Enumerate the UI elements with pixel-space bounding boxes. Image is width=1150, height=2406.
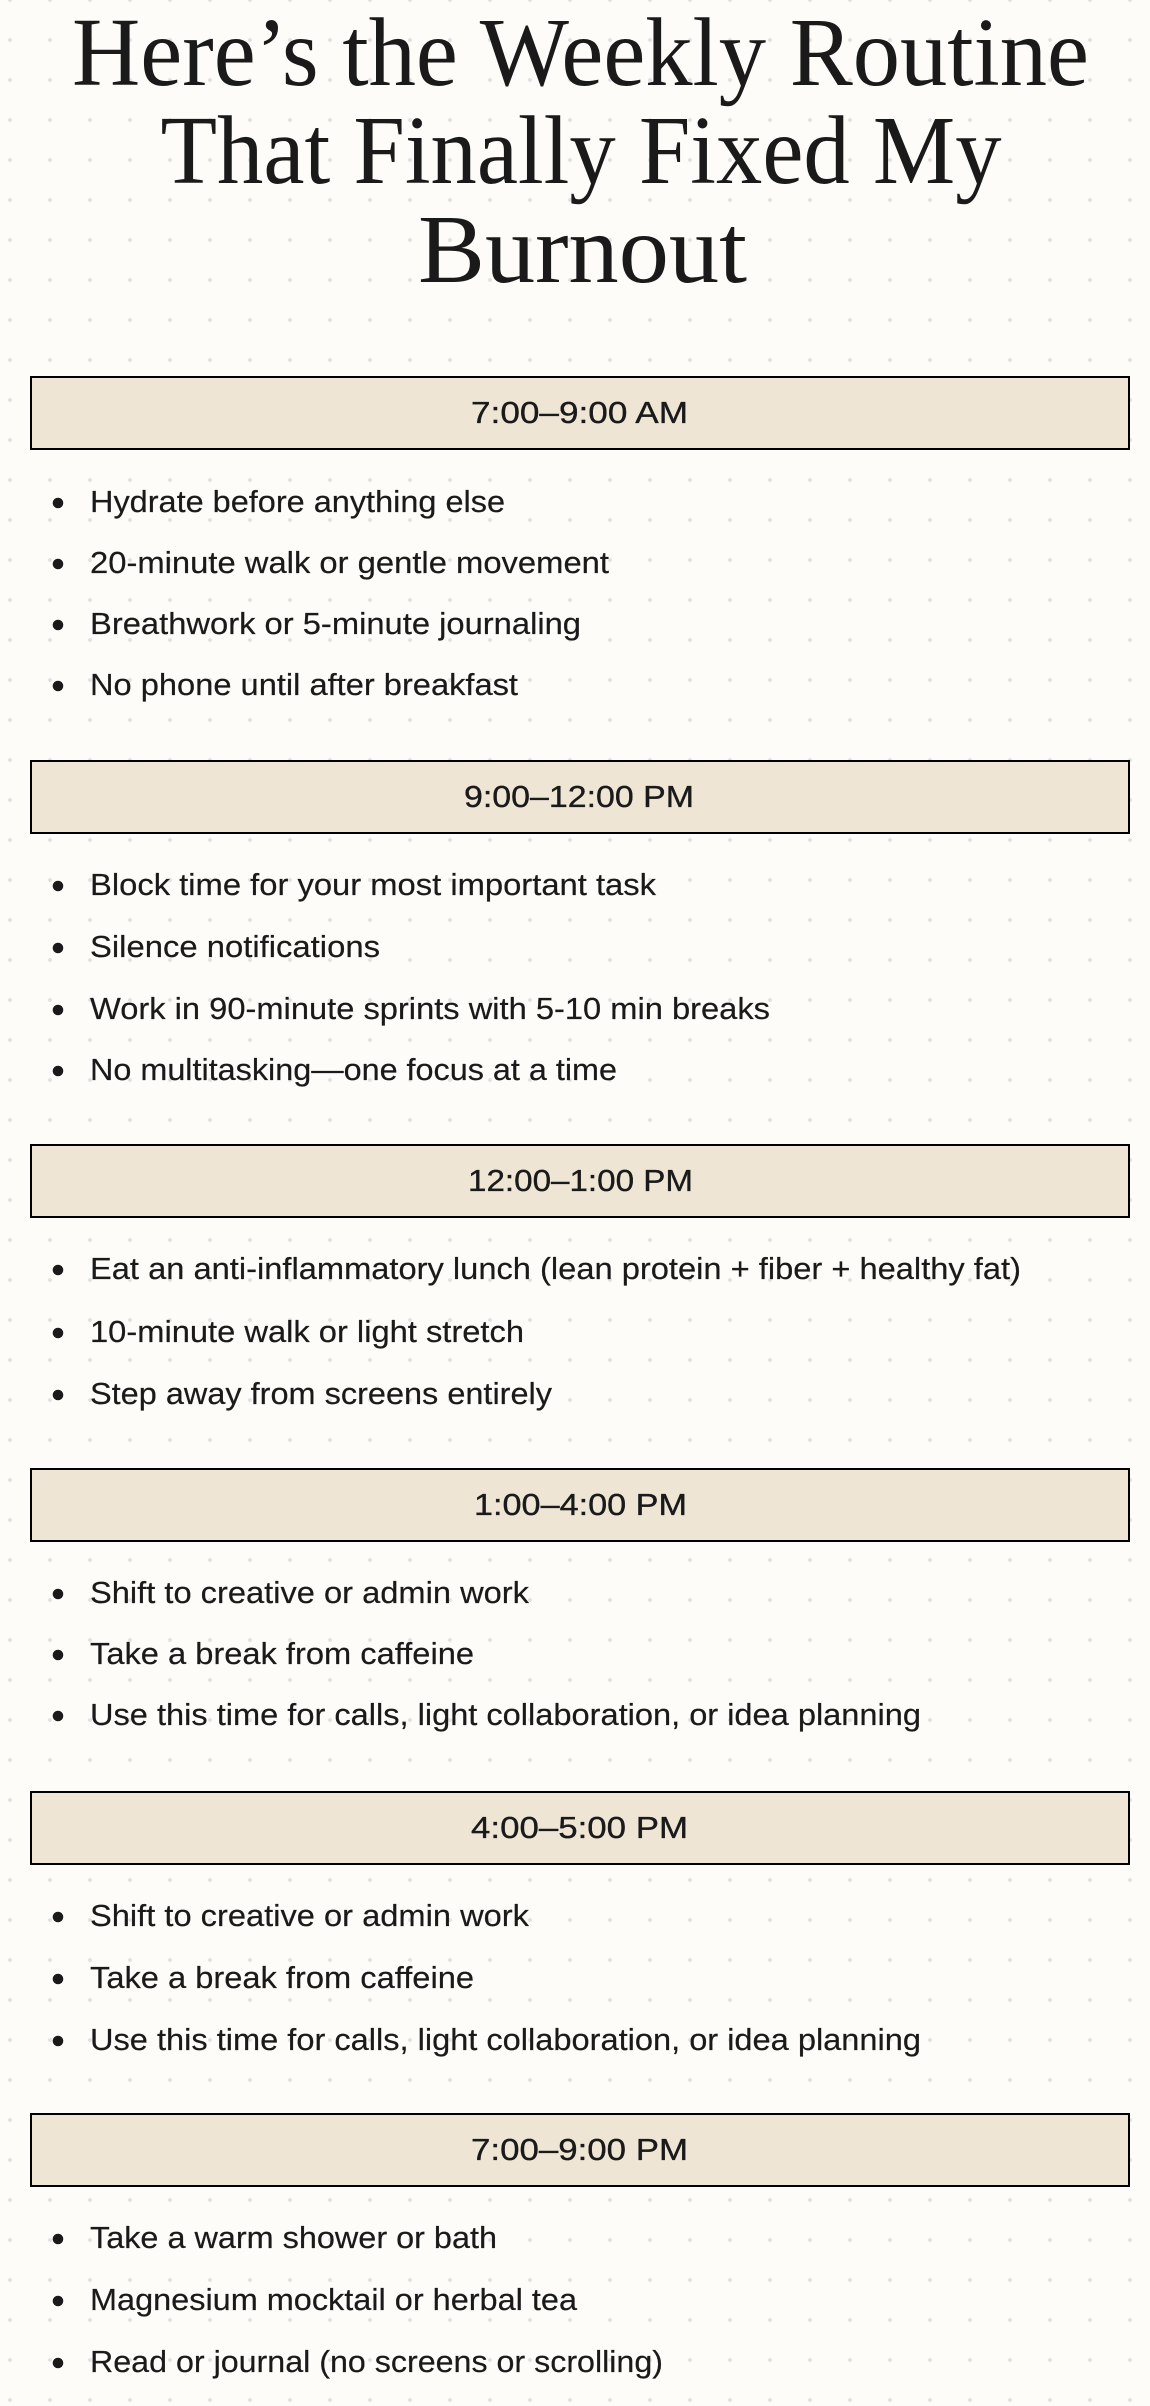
list: late morning items: Silence notifications <box>90 929 380 964</box>
panel: 4:00–5:00 PM <box>31 1792 1129 2057</box>
list: evening items: Read or journal (no screens or scrolling) <box>90 2344 663 2379</box>
title: Burnout <box>418 196 747 303</box>
heading: 1:00–4:00 PM: 1:00–4:00 PM <box>474 1487 687 1522</box>
heading: 7:00–9:00 AM <box>31 377 1129 449</box>
list: late afternoon items: Shift to creative or admin work <box>90 1898 530 1933</box>
list: evening items: Take a warm shower or bath <box>90 2220 497 2255</box>
panel: 12:00–1:00 PM <box>31 1145 1129 1411</box>
list: late afternoon items: Use this time for calls, light collaboration, or idea planning <box>90 2022 921 2057</box>
title <box>72 0 1089 303</box>
title: That Finally Fixed My <box>160 97 1002 204</box>
list: morning items: No phone until after breakfast <box>90 667 518 702</box>
heading: 9:00–12:00 PM: 9:00–12:00 PM <box>464 779 694 814</box>
heading: 4:00–5:00 PM <box>31 1792 1129 1864</box>
list: late afternoon items: Take a break from caffeine <box>90 1960 474 1995</box>
list: morning items: Hydrate before anything else <box>90 484 505 519</box>
list: lunch items: Eat an anti-inflammatory lunch (lean protein + fiber + healthy fat) <box>90 1251 1021 1286</box>
list: morning items: 20-minute walk or gentle movement <box>90 545 609 580</box>
list: late morning items <box>53 867 770 1087</box>
panel: 9:00–12:00 PM <box>31 761 1129 1087</box>
list: afternoon items: Take a break from caffeine <box>90 1636 474 1671</box>
list: late afternoon items <box>53 1898 921 2057</box>
heading: 7:00–9:00 AM: 7:00–9:00 AM <box>471 395 688 430</box>
list: afternoon items <box>53 1575 921 1732</box>
list: morning items: Breathwork or 5-minute journaling <box>90 606 581 641</box>
list: late morning items: Work in 90-minute sprints with 5-10 min breaks <box>90 991 770 1026</box>
heading: 9:00–12:00 PM <box>31 761 1129 833</box>
heading: 12:00–1:00 PM <box>31 1145 1129 1217</box>
heading: 7:00–9:00 PM: 7:00–9:00 PM <box>471 2132 688 2167</box>
list: lunch items: Step away from screens entirely <box>90 1376 553 1411</box>
panel: 7:00–9:00 PM <box>31 2114 1129 2379</box>
list: late morning items: Block time for your most important task <box>90 867 657 902</box>
list: afternoon items: Shift to creative or admin work <box>90 1575 530 1610</box>
panel: 7:00–9:00 AM <box>31 377 1129 702</box>
list: evening items: Magnesium mocktail or herbal tea <box>90 2282 578 2317</box>
list: evening items <box>53 2220 663 2379</box>
heading: 1:00–4:00 PM <box>31 1469 1129 1541</box>
panel: 1:00–4:00 PM <box>31 1469 1129 1732</box>
list: lunch items <box>53 1251 1021 1411</box>
heading: 7:00–9:00 PM <box>31 2114 1129 2186</box>
list: afternoon items: Use this time for calls, light collaboration, or idea planning <box>90 1697 921 1732</box>
title: Here’s the Weekly Routine <box>72 0 1089 106</box>
list: late morning items: No multitasking—one focus at a time <box>90 1052 617 1087</box>
heading: 4:00–5:00 PM: 4:00–5:00 PM <box>471 1810 688 1845</box>
list: lunch items: 10-minute walk or light stretch <box>90 1314 524 1349</box>
heading: 12:00–1:00 PM: 12:00–1:00 PM <box>468 1163 693 1198</box>
list: morning items <box>53 484 609 702</box>
